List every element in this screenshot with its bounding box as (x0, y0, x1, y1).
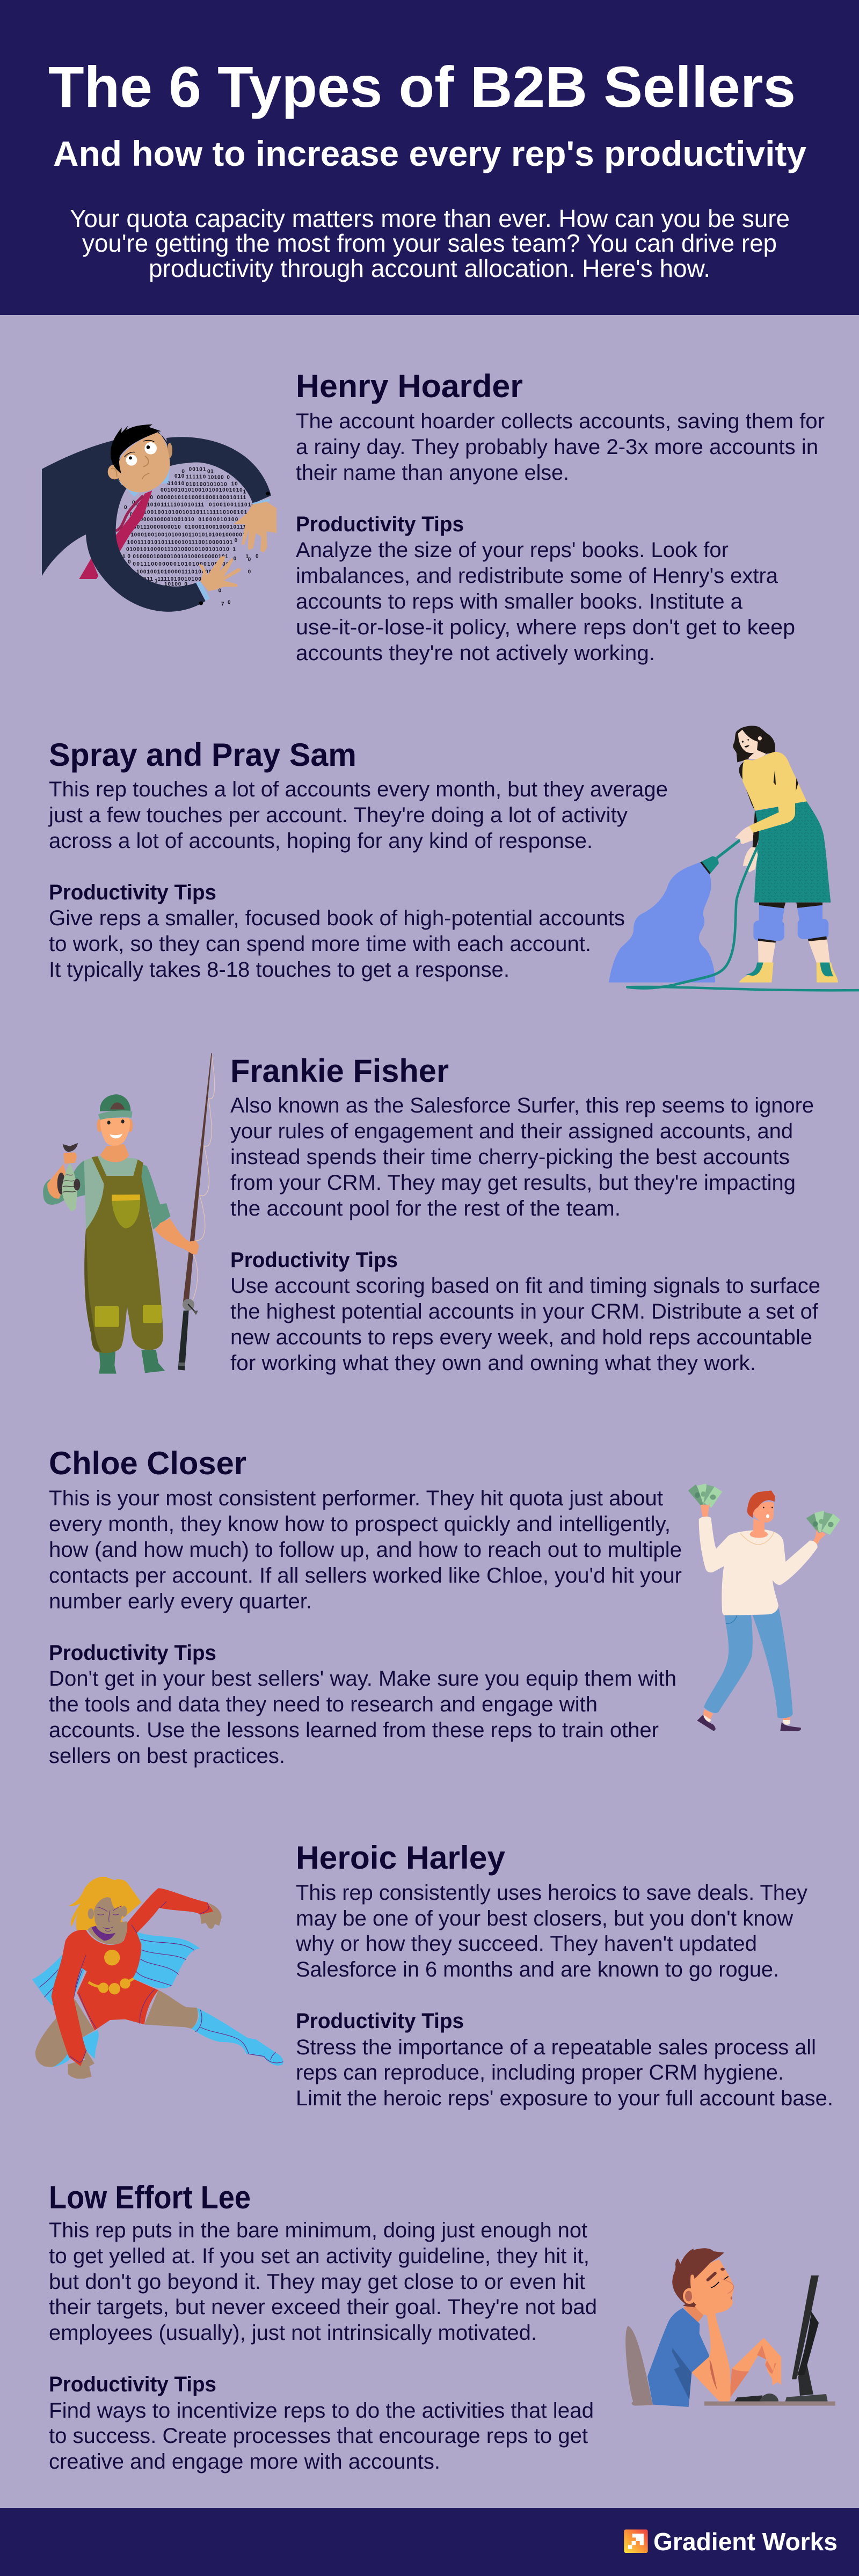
illustration: Henry hoarding data: 0 (130, 512, 133, 518)
illustration: Henry hoarding data: 0 (181, 469, 185, 474)
illustration: Henry hoarding data: 1001110101011100101110010000101 (127, 539, 233, 545)
illustration: fisherman (43, 1053, 215, 1374)
productivity tips text: Use account scoring based on fit and timing signals to surface (230, 1274, 820, 1298)
description: their targets, but never exceed their goal. They're not bad (49, 2295, 597, 2319)
description (230, 1094, 814, 1220)
productivity tips text (230, 1274, 820, 1375)
intro text: you're getting the most from your sales team? You can drive rep (82, 229, 777, 257)
heading: Heroic Harley (296, 1840, 506, 1876)
illustration: Henry hoarding data: 010 (174, 473, 185, 479)
illustration: Henry hoarding data (42, 425, 276, 612)
productivity tips heading: Productivity Tips (49, 881, 216, 904)
description: This rep touches a lot of accounts every month, but they average (49, 778, 668, 801)
description: from your CRM. They may get results, but they're impacting (230, 1171, 796, 1195)
illustration: Henry hoarding data: 0 (248, 557, 251, 562)
title: The 6 Types of B2B Sellers (48, 54, 796, 119)
intro text: Your quota capacity matters more than ever. How can you be sure (70, 204, 790, 232)
panel: Heroic Harley (32, 1840, 833, 2110)
description: across a lot of accounts, hoping for any kind of response. (49, 829, 593, 853)
illustration: Henry hoarding data: 0000100001001010 (140, 517, 194, 523)
illustration: Henry hoarding data: 010010100001110100010100101010 (126, 547, 229, 553)
illustration: Henry hoarding data: 0100100101001011011111110100101 0 (140, 509, 253, 515)
illustration: Henry hoarding data: 0 (132, 500, 135, 506)
illustration: Henry hoarding data: 0 (128, 559, 131, 565)
illustration: Henry hoarding data: 00111000000010 (133, 524, 181, 530)
illustration: Henry hoarding data: 00101 (189, 466, 206, 472)
description: the account pool for the rest of the team. (230, 1197, 621, 1220)
productivity tips text: use-it-or-lose-it policy, where reps don't get to keep (296, 616, 795, 639)
illustration: Henry hoarding data: 0 (256, 553, 259, 559)
productivity tips text: to success. Create processes that encourage reps to get (49, 2424, 588, 2448)
illustration: Henry hoarding data: 0 (228, 599, 231, 605)
illustration: Henry hoarding data: 01000010100 (198, 517, 238, 523)
description: to get yelled at. If you set an activity guideline, they hit it, (49, 2244, 589, 2268)
productivity tips heading: Productivity Tips (296, 513, 464, 536)
productivity tips heading: Productivity Tips (49, 1641, 216, 1665)
productivity tips text: accounts to reps with smaller books. Institute a (296, 590, 743, 613)
illustration: woman with hose (609, 726, 859, 990)
panel: Henry Hoarder (42, 368, 825, 665)
illustration: Henry hoarding data: 0100100111010 (209, 502, 254, 508)
illustration: Henry hoarding data: 1 (232, 547, 236, 553)
productivity tips text: sellers on best practices. (49, 1744, 285, 1768)
description: This is your most consistent performer. They hit quota just about (49, 1487, 663, 1510)
illustration: Henry hoarding data: 1 (245, 554, 249, 560)
illustration: Henry hoarding data: 1111010010100 (157, 576, 201, 582)
illustration: Henry hoarding data: 1000100100101001011010101001000001 (130, 532, 246, 538)
productivity tips text: creative and engage more with accounts. (49, 2450, 440, 2473)
productivity tips text: to work, so they can spend more time with each account. (49, 932, 591, 956)
illustration: Henry hoarding data: 001001010100101001001010 (161, 487, 243, 493)
productivity tips text: reps can reproduce, including proper CRM hygiene. (296, 2061, 784, 2084)
description: a rainy day. They probably have 2-3x more accounts in (296, 435, 818, 459)
illustration: Henry hoarding data: 00111000000010101000100000 (133, 561, 229, 567)
illustration: Henry hoarding data: 0 (150, 495, 153, 501)
productivity tips text: for working what they own and owning what they work. (230, 1351, 756, 1375)
productivity tips heading: Productivity Tips (49, 2373, 216, 2396)
productivity tips text (296, 2036, 833, 2110)
description: their name than anyone else. (296, 461, 569, 485)
heading: Frankie Fisher (230, 1053, 449, 1089)
description (296, 409, 825, 485)
illustration: Henry hoarding data: 1 (243, 489, 246, 495)
subtitle: And how to increase every rep's productivity (53, 134, 806, 173)
intro text: productivity through account allocation. Here's how. (149, 254, 710, 282)
illustration: Henry hoarding data: 0 (248, 569, 251, 575)
illustration: Henry hoarding data: 0 (227, 475, 230, 481)
illustration: Henry hoarding data: 010100101010 (186, 481, 227, 487)
illustration: Henry hoarding data: 0 (136, 502, 140, 508)
productivity tips text: It typically takes 8-18 touches to get a response. (49, 958, 509, 982)
productivity tips text: the tools and data they need to research and engage with (49, 1693, 598, 1716)
productivity tips text (296, 538, 795, 665)
illustration: Henry hoarding data: 10 (231, 481, 238, 487)
description: instead spends their time cherry-picking the best accounts (230, 1145, 790, 1169)
productivity tips text: Don't get in your best sellers' way. Make sure you equip them with (49, 1667, 676, 1690)
productivity tips text (49, 2399, 594, 2473)
description: but don't go beyond it. They may get close to or even hit (49, 2270, 585, 2294)
heading: Chloe Closer (49, 1445, 246, 1481)
illustration: Henry hoarding data: 10100 (164, 582, 181, 588)
description: contacts per account. If all sellers worked like Chloe, you'd hit your (49, 1564, 682, 1587)
description: just a few touches per account. They're doing a lot of activity (48, 803, 628, 827)
illustration: Henry hoarding data: 01 (207, 469, 214, 474)
description: may be one of your best closers, but you don't know (296, 1907, 793, 1930)
productivity tips text: Give reps a smaller, focused book of high-potential accounts (49, 906, 625, 930)
panel: Chloe Closer (49, 1445, 840, 1768)
description: employees (usually), just not intrinsically motivated. (49, 2321, 537, 2345)
illustration: Henry hoarding data: 0 (127, 553, 130, 559)
productivity tips text: Limit the heroic reps' exposure to your full account base. (296, 2087, 833, 2110)
illustration: Henry hoarding data: 10010010100001110100001 (136, 569, 215, 575)
description (295, 1881, 807, 1981)
illustration: Henry hoarding data: 111110 (186, 474, 206, 480)
productivity tips heading: Productivity Tips (230, 1248, 398, 1272)
illustration: superhero (32, 1877, 283, 2079)
productivity tips text: accounts. Use the lessons learned from these reps to train other (49, 1718, 659, 1742)
heading: Low Effort Lee (49, 2179, 251, 2215)
panel: Frankie Fisher (43, 1053, 820, 1375)
description: This rep puts in the bare minimum, doing just enough not (49, 2219, 587, 2242)
heading: Spray and Pray Sam (49, 737, 356, 773)
illustration: rep holding cash (688, 1483, 840, 1731)
description: how (and how much) to follow up, and how to reach out to multiple (49, 1538, 682, 1562)
description: every month, they know how to prospect quickly and intelligently, (49, 1512, 671, 1536)
description (48, 778, 668, 853)
productivity tips text: accounts they're not actively working. (296, 641, 655, 665)
illustration: Henry hoarding data: 010001000100010111 (185, 524, 246, 530)
heading: Henry Hoarder (296, 368, 523, 404)
illustration: Henry hoarding data: 0100001000010010100010000101 (133, 554, 228, 560)
logo wordmark: Gradient Works (653, 2528, 838, 2556)
illustration: Henry hoarding data: 0 (219, 588, 222, 594)
productivity tips text: Stress the importance of a repeatable sales process all (296, 2036, 816, 2059)
illustration: Henry hoarding data: 00000101010001000100010111 (157, 495, 246, 501)
illustration: Henry hoarding data: 0 (124, 504, 127, 510)
description: This rep consistently uses heroics to save deals. They (296, 1881, 807, 1905)
description: number early every quarter. (49, 1590, 312, 1613)
productivity tips text: imbalances, and redistribute some of Henry's extra (296, 564, 778, 588)
description: your rules of engagement and their assigned accounts, and (230, 1119, 793, 1143)
productivity tips heading: Productivity Tips (296, 2009, 464, 2033)
illustration: Henry hoarding data: 7 (221, 601, 224, 607)
illustration: Henry hoarding data: 1 (122, 554, 126, 560)
productivity tips text: the highest potential accounts in your CRM. Distribute a set of (230, 1300, 819, 1323)
illustration: Henry hoarding data: 01010 (168, 481, 185, 487)
panel: Low Effort Lee (49, 2179, 835, 2473)
description: Also known as the Salesforce Surfer, this rep seems to ignore (230, 1094, 814, 1117)
footer band (0, 2508, 859, 2576)
description: why or how they succeed. They haven't updated (295, 1932, 757, 1956)
illustration: Henry hoarding data: 10100 (208, 475, 224, 481)
illustration: Henry hoarding data: 0 (184, 582, 187, 588)
illustration: Henry hoarding data: 010101111101010111 (143, 502, 204, 508)
productivity tips text: Analyze the size of your reps' books. Look for (296, 538, 729, 562)
illustration: Henry hoarding data: 1 (155, 578, 158, 584)
intro text (70, 204, 790, 282)
panel: Spray and Pray Sam (48, 726, 859, 990)
productivity tips text: Find ways to incentivize reps to do the activities that lead (49, 2399, 594, 2423)
logo mark (624, 2529, 648, 2553)
productivity tips text (49, 1667, 676, 1768)
illustration: Henry hoarding data: 0 (235, 538, 238, 544)
description (49, 2219, 597, 2345)
description (49, 1487, 682, 1613)
header band (0, 0, 859, 315)
productivity tips text (49, 906, 625, 982)
illustration: bored rep at computer (625, 2248, 835, 2407)
description: Salesforce in 6 months and are known to go rogue. (296, 1958, 779, 1981)
illustration: Henry hoarding data: 0 (234, 556, 237, 562)
productivity tips text: new accounts to reps every week, and hold reps accountable (230, 1326, 812, 1349)
illustration: Henry hoarding data: 011 (143, 576, 153, 582)
description: The account hoarder collects accounts, saving them for (296, 409, 825, 433)
